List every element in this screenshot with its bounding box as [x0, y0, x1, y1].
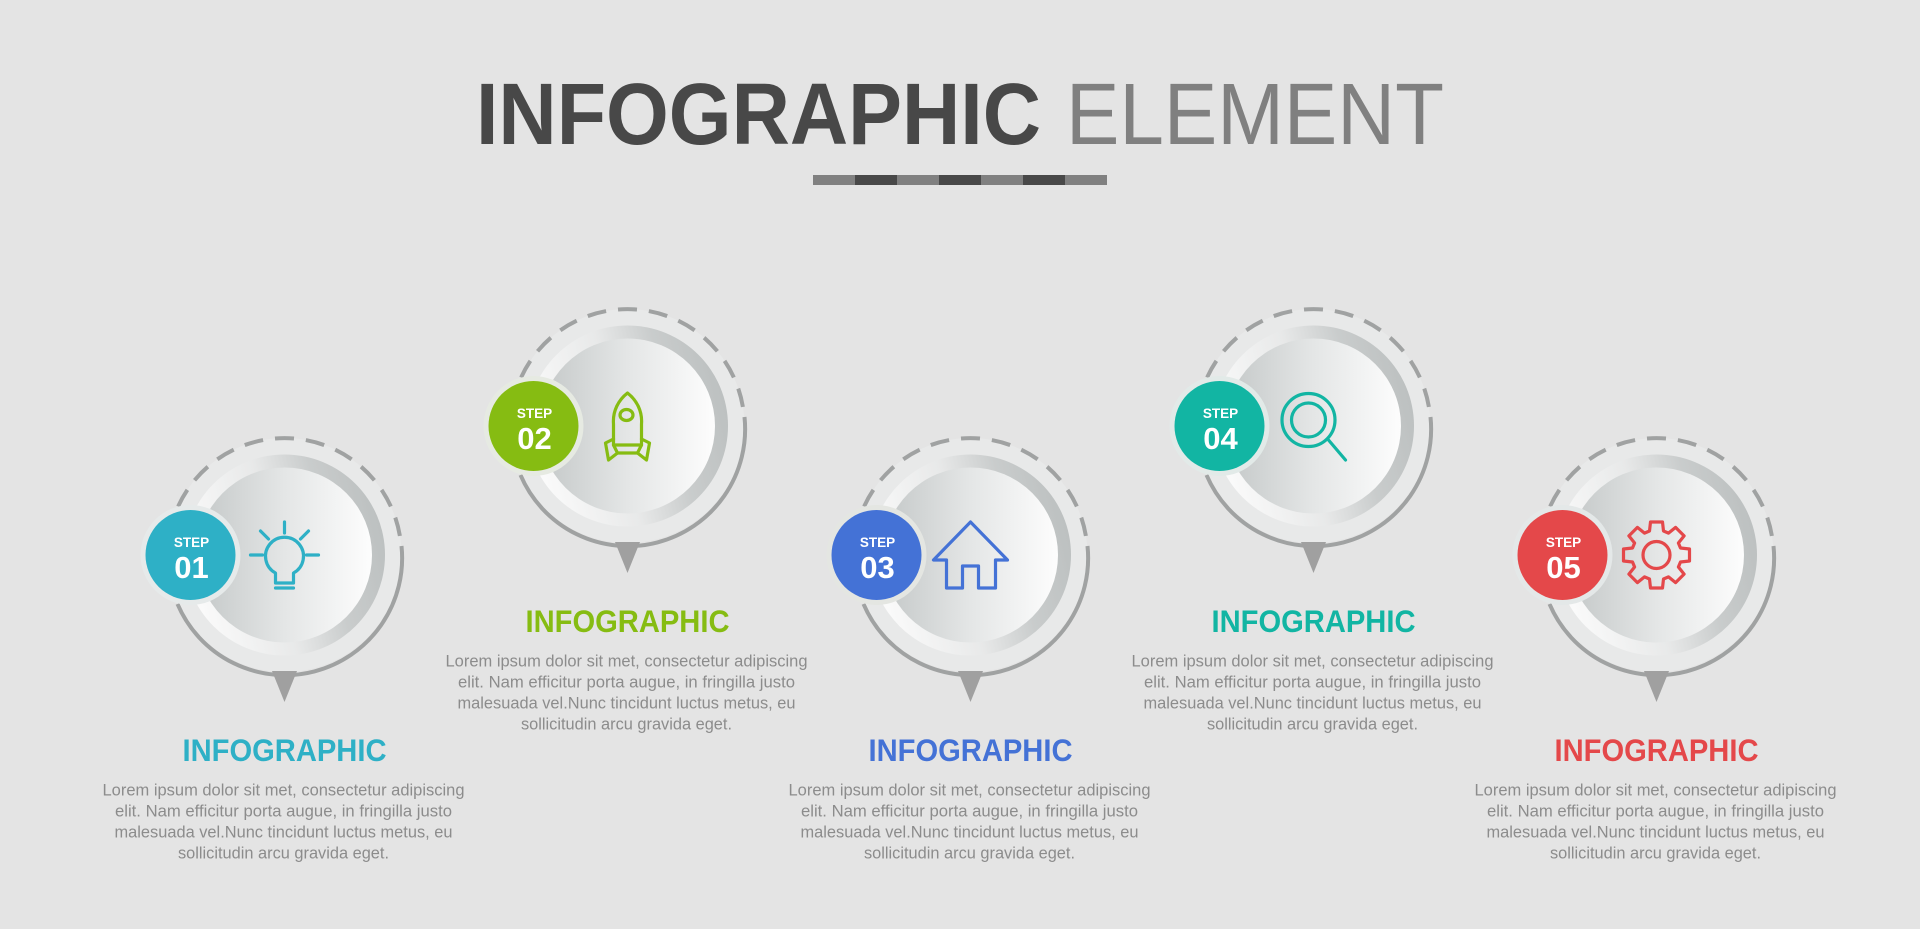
- body text: [1132, 653, 1494, 733]
- heading: INFOGRAPHIC: [1554, 732, 1758, 768]
- heading: INFOGRAPHIC: [868, 732, 1072, 768]
- body text: elit. Nam efficitur porta augue, in fringilla justo: [801, 802, 1138, 820]
- heading: INFOGRAPHIC: [526, 603, 730, 639]
- body text: [1474, 782, 1836, 862]
- title underline bar: [813, 175, 1107, 185]
- body text: Lorem ipsum dolor sit met, consectetur adipiscing: [102, 782, 464, 800]
- title: [476, 66, 1444, 163]
- title: ELEMENT: [1066, 66, 1444, 163]
- step badge: [826, 505, 926, 605]
- pin marker: [854, 438, 1088, 702]
- step badge: 02: [517, 421, 552, 456]
- body text: Lorem ipsum dolor sit met, consectetur adipiscing: [1474, 782, 1836, 800]
- body text: sollicitudin arcu gravida eget.: [1207, 715, 1418, 733]
- title: INFOGRAPHIC: [476, 66, 1041, 163]
- body text: sollicitudin arcu gravida eget.: [864, 844, 1075, 862]
- panel: step 5: [1474, 438, 1836, 862]
- body text: elit. Nam efficitur porta augue, in fringilla justo: [458, 674, 795, 692]
- icon: rocket: [606, 393, 650, 460]
- body text: [102, 782, 464, 862]
- body text: Lorem ipsum dolor sit met, consectetur adipiscing: [788, 782, 1150, 800]
- step badge: [140, 505, 240, 605]
- step badge: [1512, 505, 1612, 605]
- panel: step 2: [446, 309, 808, 733]
- pin marker: [168, 438, 402, 702]
- pin marker: [1196, 309, 1431, 573]
- body text: sollicitudin arcu gravida eget.: [178, 844, 389, 862]
- body text: Lorem ipsum dolor sit met, consectetur adipiscing: [1132, 653, 1494, 671]
- body text: Lorem ipsum dolor sit met, consectetur adipiscing: [446, 653, 808, 671]
- pin marker: [510, 309, 745, 573]
- step badge: 04: [1203, 421, 1238, 456]
- icon: magnifier: [1282, 394, 1346, 460]
- body text: malesuada vel.Nunc tincidunt luctus metus, eu: [1486, 823, 1824, 841]
- step badge: STEP: [517, 406, 552, 421]
- pin marker: [1540, 438, 1774, 702]
- step badge: [1170, 376, 1270, 476]
- body text: malesuada vel.Nunc tincidunt luctus metus, eu: [458, 694, 796, 712]
- step badge: STEP: [860, 535, 895, 550]
- icon: house: [934, 522, 1008, 588]
- body text: sollicitudin arcu gravida eget.: [521, 715, 732, 733]
- body text: elit. Nam efficitur porta augue, in fringilla justo: [1144, 674, 1481, 692]
- step badge: [484, 376, 584, 476]
- step badge: 03: [860, 550, 895, 585]
- body text: elit. Nam efficitur porta augue, in fringilla justo: [1487, 802, 1824, 820]
- body text: [788, 782, 1150, 862]
- body text: malesuada vel.Nunc tincidunt luctus metus, eu: [800, 823, 1138, 841]
- step badge: STEP: [1203, 406, 1238, 421]
- heading: INFOGRAPHIC: [1212, 603, 1416, 639]
- body text: sollicitudin arcu gravida eget.: [1550, 844, 1761, 862]
- body text: elit. Nam efficitur porta augue, in fringilla justo: [115, 802, 452, 820]
- body text: malesuada vel.Nunc tincidunt luctus metus, eu: [114, 823, 452, 841]
- step badge: 05: [1546, 550, 1581, 585]
- heading: INFOGRAPHIC: [182, 732, 386, 768]
- step badge: STEP: [174, 535, 209, 550]
- panel: step 4: [1132, 309, 1494, 733]
- panel: step 3: [788, 438, 1150, 862]
- body text: [446, 653, 808, 733]
- icon: light bulb: [250, 522, 318, 588]
- panel: step 1: [102, 438, 464, 862]
- icon: gear: [1624, 522, 1690, 588]
- body text: malesuada vel.Nunc tincidunt luctus metus, eu: [1144, 694, 1482, 712]
- step badge: 01: [174, 550, 209, 585]
- step badge: STEP: [1546, 535, 1581, 550]
